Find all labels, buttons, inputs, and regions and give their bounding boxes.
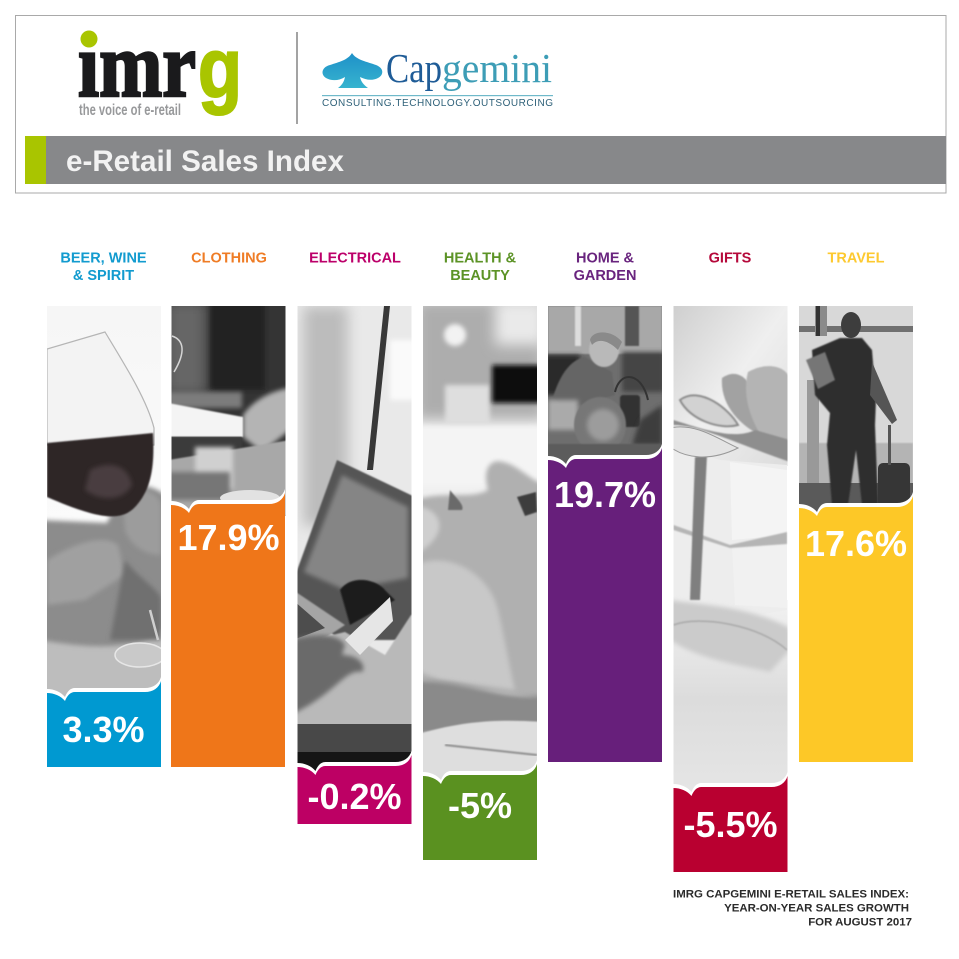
photo: clothing shopping — [172, 306, 286, 516]
value panel — [674, 776, 788, 872]
value: 3.3% — [62, 709, 145, 750]
column: health and beauty — [423, 252, 537, 860]
category label: CLOTHING — [191, 250, 267, 266]
category label: TRAVEL — [828, 250, 885, 266]
photo: laptop and phone — [298, 306, 412, 771]
icon: spade — [323, 53, 382, 88]
logo divider — [296, 32, 298, 124]
white wavy edge — [423, 760, 537, 860]
value panel — [47, 681, 161, 767]
column: travel — [799, 250, 913, 762]
white wavy edge — [47, 677, 161, 767]
category label: GARDEN — [574, 268, 636, 284]
title: e-Retail Sales Index — [66, 145, 345, 178]
white wavy edge — [171, 489, 285, 767]
logo strapline: CONSULTING.TECHNOLOGY.OUTSOURCING — [322, 98, 553, 109]
value panel — [548, 448, 662, 762]
photo: traveller with suitcase — [799, 306, 913, 518]
category label: BEER, WINE — [60, 250, 147, 266]
value: 17.9% — [177, 517, 280, 558]
logo rule — [322, 95, 553, 96]
source line 2: YEAR-ON-YEAR SALES GROWTH — [724, 902, 909, 914]
logo tagline: the voice of e-retail — [79, 102, 181, 119]
logo: Capgemini — [322, 45, 553, 109]
value panel — [799, 496, 913, 762]
column: gifts — [670, 250, 790, 872]
column: clothing — [165, 250, 290, 767]
column: beer, wine and spirit — [47, 252, 161, 767]
value: 19.7% — [554, 474, 656, 515]
photo: boy gardening — [545, 306, 664, 470]
column: electrical — [290, 250, 415, 824]
title accent — [25, 136, 46, 184]
source line 3: FOR AUGUST 2017 — [808, 916, 912, 928]
white wavy edge — [799, 492, 913, 762]
logo: lime g: g — [198, 21, 242, 115]
value: -5% — [448, 785, 512, 826]
logo: imrg — [78, 30, 238, 116]
category label: HEALTH & — [444, 250, 517, 266]
photo: wine glass — [47, 306, 161, 697]
value panel — [298, 755, 412, 824]
category label: GIFTS — [709, 250, 752, 266]
source note — [673, 888, 912, 928]
Capgemini wordmark: gemini — [442, 45, 552, 91]
header panel — [16, 14, 946, 193]
value: -0.2% — [307, 776, 402, 817]
category label: ELECTRICAL — [309, 250, 401, 266]
category label: HOME & — [576, 250, 635, 266]
white wavy edge — [674, 772, 788, 872]
title bar — [46, 136, 946, 184]
white wavy edge — [548, 444, 662, 762]
header border — [16, 16, 946, 193]
value panel — [423, 764, 537, 860]
source line 1: IMRG CAPGEMINI E-RETAIL SALES INDEX: — [673, 888, 909, 900]
category label: BEAUTY — [450, 268, 510, 284]
photo: face and towel — [423, 306, 537, 780]
imrg wordmark: imr — [78, 14, 196, 116]
value: 17.6% — [805, 523, 907, 564]
Capgemini wordmark: Cap — [386, 45, 442, 91]
white wavy edge — [298, 751, 412, 824]
column: home and garden — [545, 250, 664, 762]
photo: gift box — [670, 306, 790, 798]
category label: & SPIRIT — [73, 268, 134, 284]
value panel — [171, 493, 285, 767]
logo: lime dot — [80, 30, 98, 48]
value: -5.5% — [683, 804, 778, 845]
